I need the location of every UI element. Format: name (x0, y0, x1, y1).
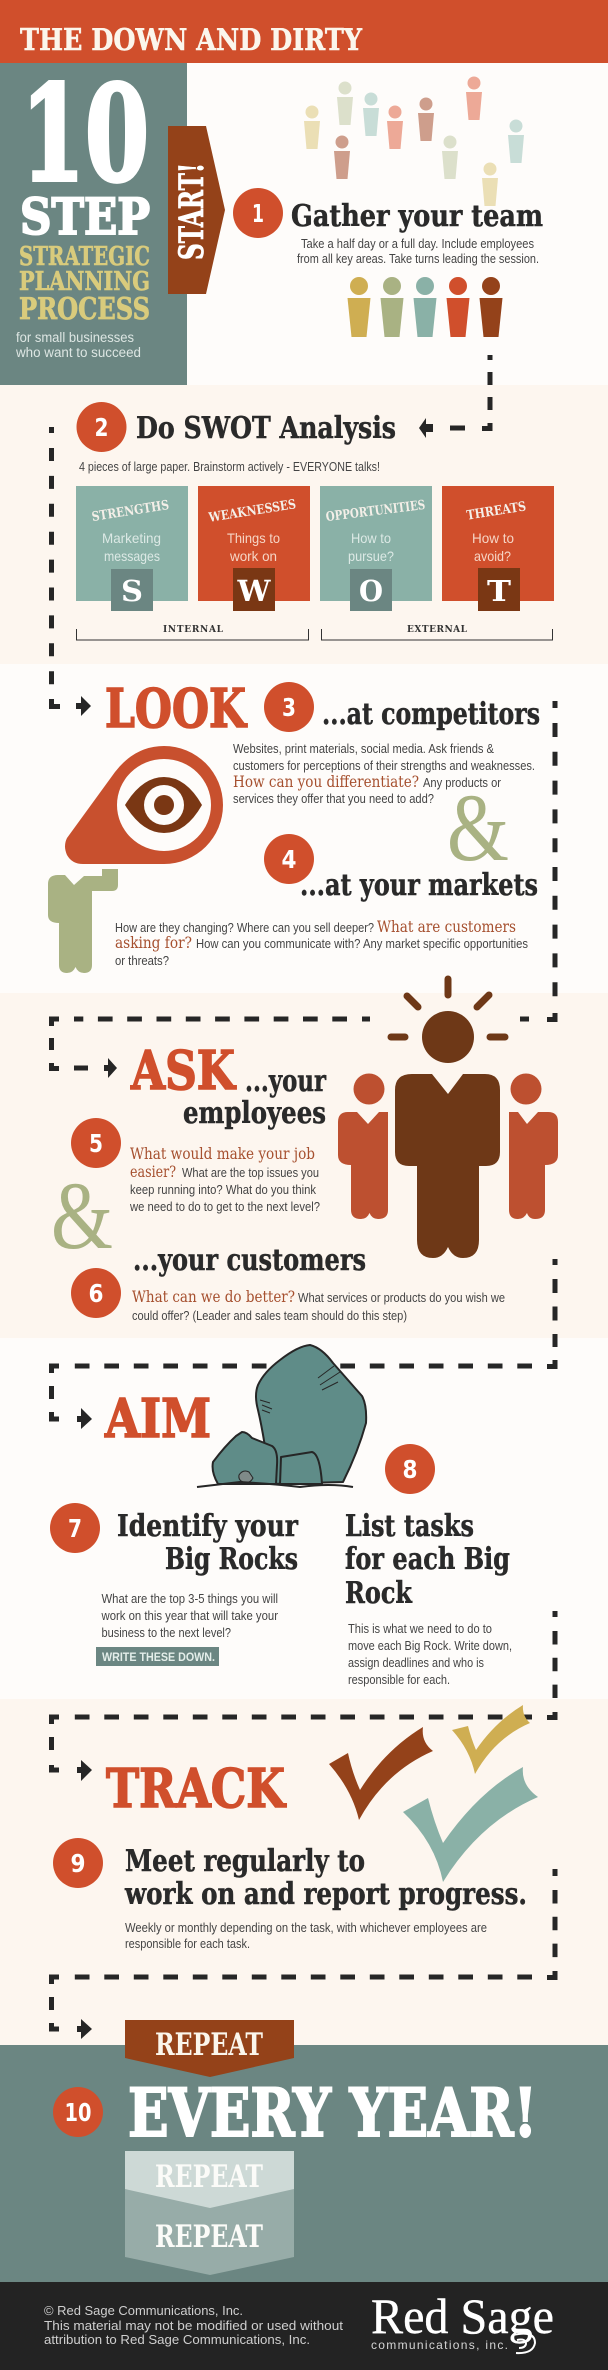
callout: write these down (96, 1647, 219, 1666)
description 6: What services or products do you wish we (298, 1291, 505, 1305)
panel: strengths: S (121, 574, 143, 608)
ribbon: repeat faded dark: REPEAT (155, 2219, 263, 2255)
logo: Red Sage (371, 2288, 554, 2344)
panel: threats (442, 486, 554, 611)
icon: brown check (329, 1727, 433, 1820)
step 7 (50, 1503, 299, 1666)
description 4: How are they changing? Where can you sell deeper? (115, 921, 374, 935)
description 4: or threats? (115, 954, 169, 968)
panel: opportunities (320, 486, 432, 611)
ribbon: repeat brown: REPEAT (155, 2027, 263, 2063)
heading: list tasks: Rock (345, 1576, 413, 1611)
bracket: internal (76, 625, 308, 640)
description 1: Take a half day or a full day. Include employees (301, 237, 534, 251)
ampersand: & (447, 774, 509, 881)
description 8: responsible for each. (348, 1673, 450, 1687)
heading: at your markets: ...at your markets (300, 868, 538, 903)
description 9 (125, 1921, 487, 1951)
banner title: THE DOWN AND DIRTY (20, 23, 362, 58)
panel: strengths: STRENGTHS (91, 498, 170, 525)
panel: strengths (76, 486, 188, 611)
subtitle: who want to succeed (15, 345, 141, 360)
description 3: Websites, print materials, social media. Ask friends & (233, 742, 495, 756)
title: 10: 10 (21, 57, 149, 212)
heading: look: LOOK (105, 678, 248, 740)
title: planning: PLANNING (19, 267, 150, 297)
ribbon: repeat faded light (125, 2151, 294, 2208)
badge 2 (76, 402, 126, 452)
heading: your employees: employees (183, 1096, 326, 1131)
heading: identify big rocks (117, 1509, 299, 1577)
description 3: How can you differentiate? (233, 773, 419, 791)
description 5: keep running into? What do you think (130, 1183, 317, 1197)
icon: megaphone eye (65, 746, 223, 864)
heading: list tasks: for each Big (345, 1542, 510, 1577)
heading: at competitors: ...at competitors (322, 697, 540, 732)
ribbon: repeat brown (125, 2020, 294, 2077)
panel: opportunities: pursue? (348, 548, 394, 564)
heading: your employees: ...your (245, 1064, 327, 1099)
panel: threats: T (487, 574, 511, 608)
ribbon: repeat faded light: REPEAT (155, 2159, 263, 2195)
bracket: internal: INTERNAL (163, 625, 224, 635)
footer (0, 2282, 608, 2370)
heading: identify big rocks: Big Rocks (165, 1542, 298, 1577)
badge 8: 8 (402, 1455, 418, 1484)
description 3: customers for perceptions of their strengths and weaknesses. (233, 759, 535, 773)
step 3 (233, 682, 540, 806)
description 6 (132, 1288, 505, 1323)
badge 4: 4 (282, 845, 296, 874)
badge 4 (264, 834, 314, 884)
arrow: step 1 to step 2 (419, 355, 490, 438)
arrow: aim to track (52, 1611, 555, 1781)
arrow: step 2 to look (52, 427, 91, 716)
logo: communications, inc. (371, 2338, 508, 2352)
icon: scattered faint people (304, 76, 524, 206)
icon: team of five (348, 277, 502, 337)
start arrow: START! (172, 163, 212, 260)
badge 10: 10 (64, 2098, 92, 2127)
panel: strengths: messages (104, 548, 160, 564)
icon: big rocks (197, 1345, 366, 1487)
heading: list tasks: List tasks (345, 1509, 474, 1544)
step 5 (71, 1118, 320, 1214)
panel: threats: How to (472, 530, 514, 546)
badge 10 (53, 2087, 103, 2137)
header banner (0, 0, 608, 63)
arrow: look to ask (52, 701, 555, 1078)
copyright: © Red Sage Communications, Inc. (44, 2303, 243, 2318)
description 1: from all key areas. Take turns leading the session. (297, 252, 539, 266)
description 5: we need to do to get to the next level? (129, 1200, 320, 1214)
panel: strengths: Marketing (102, 530, 161, 546)
heading: ask: ASK (130, 1040, 237, 1102)
icon: person holding megaphone (48, 869, 118, 973)
icon: teal check (403, 1767, 538, 1882)
description 7: business to the next level? (102, 1626, 231, 1640)
description 8: move each Big Rock. Write down, (348, 1639, 512, 1653)
description 7: What are the top 3-5 things you will (102, 1592, 278, 1606)
panel: weaknesses: Things to (227, 530, 280, 546)
badge 6: 6 (88, 1279, 104, 1308)
bracket: external (322, 625, 552, 640)
heading: track: TRACK (106, 1758, 287, 1820)
description 4: What are customers (377, 918, 516, 936)
title: strategic: STRATEGIC (19, 242, 150, 272)
heading: list tasks (345, 1509, 510, 1611)
heading: your employees (183, 1064, 327, 1131)
description 6: could offer? (Leader and sales team should do this step) (132, 1309, 407, 1323)
step 8 (345, 1444, 512, 1687)
description 4 (115, 918, 528, 968)
description 5 (129, 1145, 320, 1214)
description 8 (348, 1622, 512, 1687)
panel: opportunities: O (359, 574, 383, 608)
step 2 heading (76, 402, 396, 474)
step 9 (53, 1838, 527, 1951)
panel: weaknesses (198, 486, 310, 611)
description 4: asking for? (115, 934, 192, 952)
icon: leader figure (391, 979, 505, 1258)
badge 3: 3 (282, 693, 296, 722)
heading: aim: AIM (104, 1388, 211, 1450)
heading: meet regularly: work on and report progress. (124, 1877, 527, 1912)
copyright: attribution to Red Sage Communications, Inc. (44, 2332, 310, 2347)
bracket: external: EXTERNAL (407, 625, 468, 635)
description 5: What would make your job (130, 1145, 315, 1163)
ampersand: & (51, 1162, 113, 1269)
arrow: ask to aim (52, 1259, 555, 1429)
description 8: assign deadlines and who is (348, 1656, 484, 1670)
subtitle (15, 330, 141, 360)
description 8: This is what we need to do to (348, 1622, 492, 1636)
badge 3 (264, 682, 314, 732)
panel: weaknesses: WEAKNESSES (207, 497, 297, 526)
start arrow (168, 126, 225, 294)
heading: do swot: Do SWOT Analysis (136, 411, 396, 446)
description 7 (101, 1592, 278, 1640)
description 4: How can you communicate with? Any market specific opportunities (196, 937, 528, 951)
description 5: easier? (130, 1163, 176, 1181)
badge 6 (71, 1268, 121, 1318)
copyright: This material may not be modified or used without (44, 2318, 343, 2333)
step 1 (233, 188, 543, 266)
description 6: What can we do better? (132, 1288, 295, 1306)
arrow: track to repeat (52, 1869, 555, 2039)
icon: left employee (338, 1074, 388, 1219)
step 6 (71, 1268, 505, 1323)
panel: threats: THREATS (466, 499, 527, 524)
badge 5: 5 (89, 1129, 103, 1158)
badge 2: 2 (94, 413, 108, 442)
ribbon: repeat faded dark (125, 2185, 294, 2275)
badge 5 (71, 1118, 121, 1168)
description 2: 4 pieces of large paper. Brainstorm actively - EVERYONE talks! (79, 460, 380, 474)
title: process: PROCESS (19, 292, 150, 327)
panel: threats: avoid? (474, 548, 511, 564)
description 3: services they offer that you need to add? (233, 792, 434, 806)
badge 8 (385, 1444, 435, 1494)
heading: your customers: ...your customers (133, 1243, 366, 1278)
step 10 (53, 2074, 537, 2152)
panel: opportunities: How to (351, 530, 391, 546)
step 4 (115, 834, 538, 968)
description 9: responsible for each task. (125, 1937, 250, 1951)
description 9: Weekly or monthly depending on the task, with whichever employees are (125, 1921, 487, 1935)
heading: meet regularly (124, 1844, 527, 1912)
panel: weaknesses: W (236, 574, 271, 608)
description 1 (297, 237, 539, 266)
description 7: work on this year that will take your (101, 1609, 278, 1623)
badge 1: 1 (252, 199, 264, 228)
icon: right employee (509, 1074, 558, 1219)
panel: weaknesses: work on (229, 548, 277, 564)
heading: gather your team: Gather your team (291, 199, 543, 234)
callout: write these down: WRITE THESE DOWN. (102, 1650, 215, 1664)
heading: meet regularly: Meet regularly to (125, 1844, 365, 1879)
description 3: Any products or (423, 776, 501, 790)
badge 1 (233, 188, 283, 238)
badge 7 (50, 1503, 100, 1553)
copyright (44, 2303, 343, 2347)
badge 9 (53, 1838, 103, 1888)
heading: identify big rocks: Identify your (117, 1509, 299, 1544)
title panel (0, 57, 187, 385)
description 5: What are the top issues you (182, 1166, 319, 1180)
badge 9: 9 (70, 1849, 86, 1878)
description 3 (233, 742, 535, 806)
panel: opportunities: OPPORTUNITIES (325, 498, 426, 525)
subtitle: for small businesses (16, 330, 134, 345)
icon: gold check (452, 1705, 530, 1774)
title: step: STEP (20, 187, 150, 246)
badge 7: 7 (68, 1514, 82, 1543)
